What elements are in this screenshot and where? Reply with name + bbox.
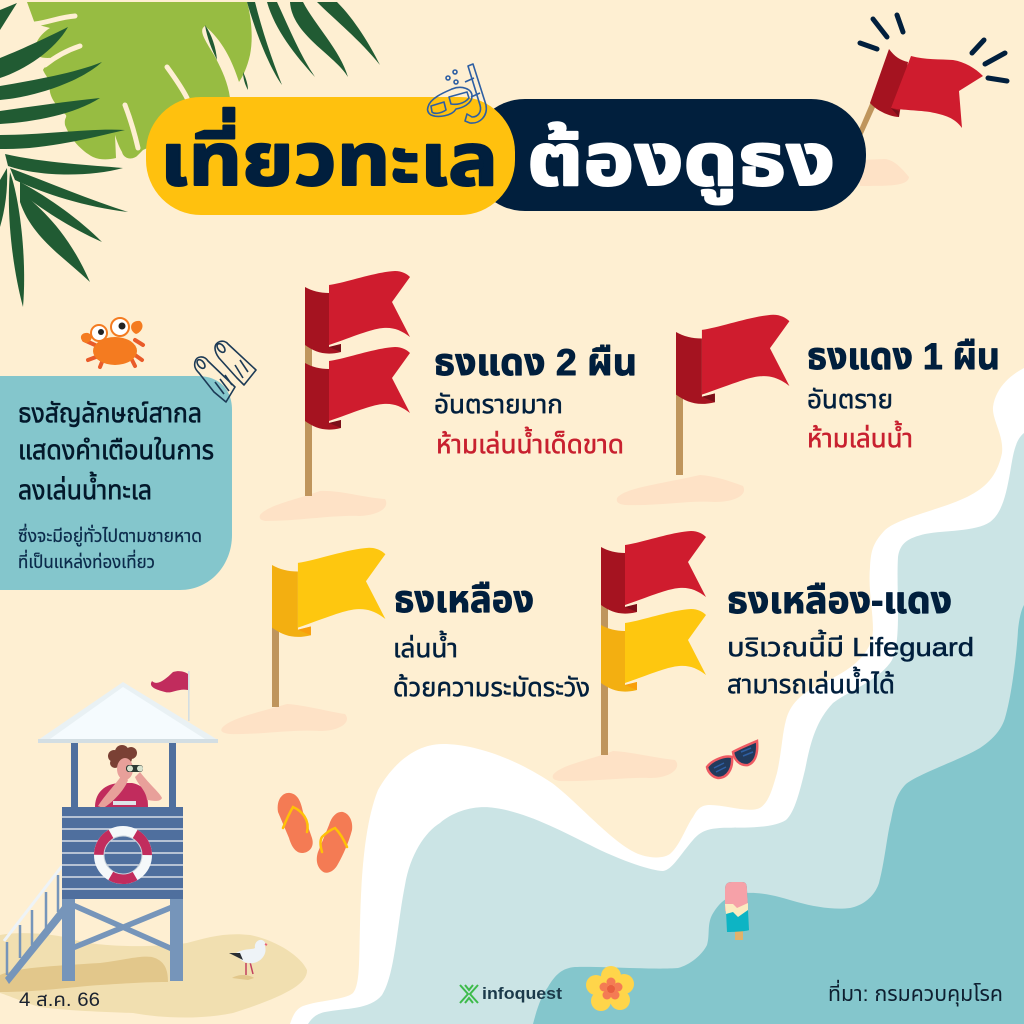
sand mound (553, 751, 677, 781)
icon: flip flops (278, 793, 352, 873)
sand mound (260, 491, 386, 521)
icon: seagull (229, 940, 267, 980)
text: with caution: ด้วยความระมัดระวัง (393, 672, 590, 702)
panel note line 1: ซึ่งจะมีอยู่ทั่วไปตามชายหาด (18, 523, 202, 548)
title navy pill (470, 99, 866, 211)
text: no swimming: ห้ามเล่นน้ำ (807, 420, 913, 453)
title yellow pill (146, 97, 515, 215)
palm leaves (0, 2, 380, 307)
upper red flag (305, 271, 410, 354)
text: dangerous: อันตราย (807, 384, 893, 414)
text: swimming allowed: สามารถเล่นน้ำได้ (727, 666, 895, 699)
icon: crab (81, 318, 143, 367)
tower stairs (4, 866, 65, 984)
lower red flag (305, 347, 410, 430)
panel: universal flag signal (0, 376, 232, 590)
icon: popsicle (725, 882, 749, 940)
title text left: เที่ยวทะเล (160, 108, 498, 201)
text: lifeguard area: บริเวณนี้มี Lifeguard (727, 629, 974, 662)
text: absolutely no swimming: ห้ามเล่นน้ำเด็ดขาด (436, 426, 624, 459)
monstera leaf (27, 2, 252, 159)
logo wordmark: infoquest (482, 984, 562, 1003)
life ring (90, 822, 156, 888)
title (146, 97, 866, 215)
panel heading line 1: ธงสัญลักษณ์สากล (18, 398, 202, 428)
panel heading line 3: ลงเล่นน้ำทะเล (18, 471, 152, 505)
tower roof (38, 682, 218, 743)
white surf band (290, 368, 1024, 1024)
icon: flippers (195, 341, 256, 402)
pole (272, 625, 279, 707)
heading: red 1 flag: ธงแดง 1 ผืน (807, 336, 1000, 377)
pole (601, 600, 608, 755)
icon: snorkel mask (428, 64, 486, 123)
text: very dangerous: อันตรายมาก (434, 389, 563, 419)
deep sea (533, 605, 1024, 1024)
flag group: yellow and red flags (553, 531, 706, 781)
tower cabin (62, 807, 183, 899)
flag group: yellow flag (221, 548, 385, 734)
tower sand (0, 933, 307, 1018)
pole (676, 390, 683, 475)
logo mark (460, 985, 478, 1003)
icon: flower (586, 966, 634, 1011)
yellow flag (601, 609, 706, 692)
text: swim: เล่นน้ำ (393, 630, 458, 663)
heading: yellow flag: ธงเหลือง (394, 579, 534, 620)
icon: sunglasses (707, 741, 757, 778)
top right waving red flag (858, 15, 1007, 136)
lifeguard tower (4, 671, 218, 984)
flag group: red one flag (617, 315, 789, 505)
infoquest logo (460, 984, 562, 1003)
date: 4 ส.ค. 66 (19, 990, 100, 1011)
heading: yellow-red flag: ธงเหลือง-แดง (727, 580, 952, 621)
light sea (308, 433, 1024, 1024)
source: ที่มา: กรมควบคุมโรค (828, 979, 1003, 1007)
heading: red 2 flags: ธงแดง 2 ผืน (434, 342, 637, 383)
flag group: red two flags (260, 271, 410, 521)
lifeguard figure (95, 745, 162, 808)
sand mound (221, 704, 347, 734)
yellow flag (272, 548, 385, 637)
red flag (601, 531, 706, 614)
tower legs (62, 899, 183, 981)
small flag on roof (151, 671, 190, 721)
title text right: ต้องดูธง (527, 118, 835, 205)
red flag (676, 315, 789, 404)
title sand mound (860, 159, 909, 186)
pole (305, 342, 312, 496)
panel background (0, 376, 232, 590)
panel note line 2: ที่เป็นแหล่งท่องเที่ยว (18, 549, 155, 572)
sand mound (617, 475, 744, 505)
panel heading line 2: แสดงคำเตือนในการ (18, 435, 214, 465)
tower posts (71, 743, 176, 809)
